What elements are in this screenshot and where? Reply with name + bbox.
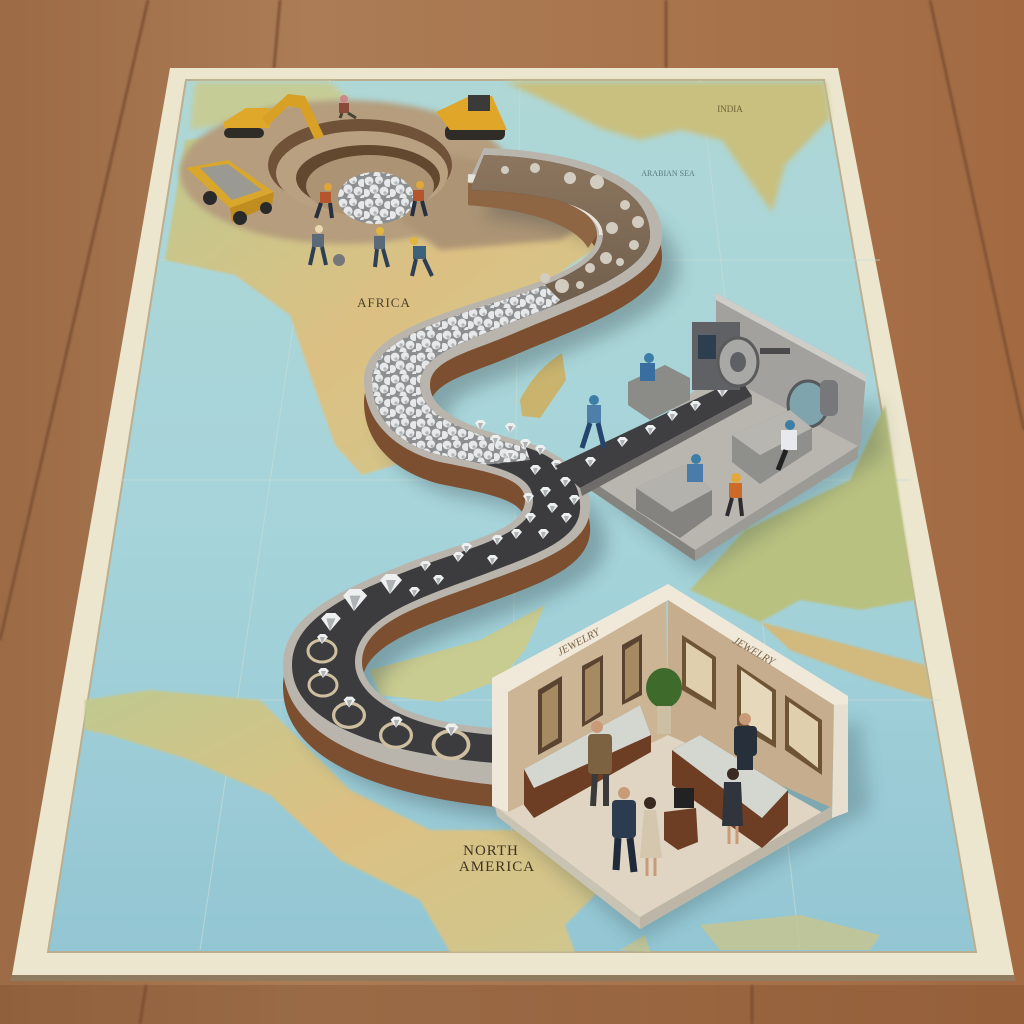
- miners: [310, 95, 432, 276]
- land: North America: [85, 690, 605, 952]
- rough diamonds in pit: [338, 172, 414, 224]
- shop people: [588, 721, 612, 806]
- conveyor cream lip: [468, 178, 603, 235]
- wall sign right: JEWELRY: [730, 635, 778, 669]
- factory shadow: [600, 400, 885, 575]
- land: Africa: [165, 130, 610, 475]
- cutting machines: [692, 322, 838, 427]
- factory floor: [590, 372, 858, 550]
- bulldozer: [436, 95, 507, 140]
- dump truck: [186, 160, 274, 225]
- store left wall: [508, 598, 668, 812]
- belt contents: [372, 155, 650, 465]
- map label: India: INDIA: [717, 104, 743, 114]
- map label: Africa: AFRICA: [357, 295, 411, 310]
- glass counter left: [524, 705, 651, 818]
- land: Arabia and India: [505, 82, 830, 212]
- store right wall: [668, 598, 834, 808]
- land: top left coast: [190, 82, 350, 130]
- jewelry store: [492, 584, 870, 940]
- mine pit: [180, 100, 600, 250]
- plant: [646, 668, 682, 734]
- map label: North America: NORTH: [463, 843, 519, 859]
- finished rings: [308, 634, 468, 758]
- store shadow: [500, 720, 870, 940]
- rough diamonds scattered: [321, 420, 580, 631]
- conveyor path: [283, 140, 680, 819]
- land: Europe: [690, 405, 915, 622]
- center pedestal: [664, 788, 698, 850]
- map label: North America: AMERICA: [459, 859, 535, 875]
- factory back wall: [716, 293, 866, 450]
- cutting factory: [555, 293, 885, 575]
- land: central strip: [370, 605, 545, 702]
- map label: Arabian Sea: ARABIAN SEA: [641, 169, 695, 178]
- diamonds on feed belt: [585, 387, 728, 467]
- wall display cases: [538, 634, 822, 775]
- feed belt: [555, 378, 752, 488]
- dense rough diamonds section: [372, 285, 560, 465]
- land: Madagascar: [520, 353, 566, 418]
- wall sign left: JEWELRY: [555, 625, 603, 659]
- conveyor shadow: [299, 182, 678, 819]
- desks: [628, 365, 690, 420]
- wall top rim: [492, 584, 848, 706]
- sand and rocks section: [470, 155, 650, 310]
- rocks on conveyor: [501, 163, 644, 293]
- workers: [640, 353, 655, 381]
- land: southern Europe strip: [760, 622, 932, 700]
- dark belt: [292, 155, 650, 763]
- excavator: [224, 94, 324, 140]
- glass counter right: [672, 735, 788, 848]
- conveyor end wall: [468, 183, 597, 248]
- conveyor outer brown wall: [283, 170, 662, 807]
- store floor: [495, 725, 832, 929]
- conveyor grey rim: [283, 148, 662, 785]
